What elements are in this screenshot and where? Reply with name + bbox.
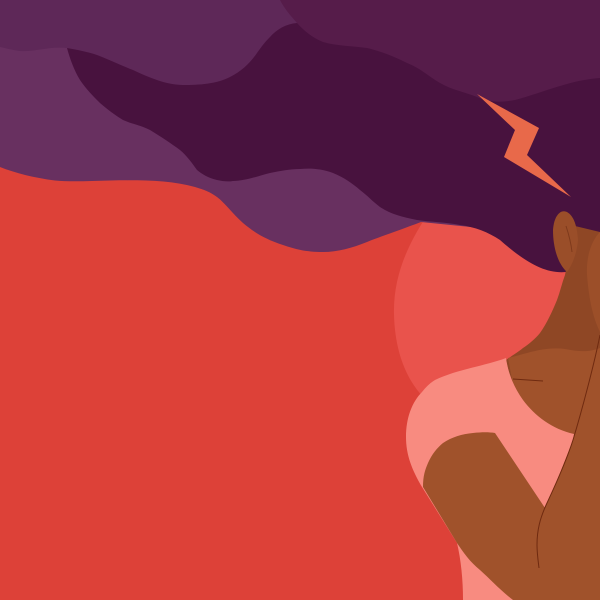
hair: dark main mass xyxy=(67,23,600,272)
figure: neck xyxy=(506,226,600,400)
hair: mid purple top layer xyxy=(0,0,300,110)
figure: face xyxy=(587,232,600,332)
figure: arm contour line xyxy=(537,335,600,568)
figure: chest highlight xyxy=(508,348,600,440)
hair: light purple back layer xyxy=(0,0,600,252)
icon: lightning bolt xyxy=(477,94,571,197)
figure: collarbone line xyxy=(513,379,543,381)
hair: plum top right layer xyxy=(280,0,600,102)
background blob: lighter red halo xyxy=(394,220,600,400)
figure: ear xyxy=(553,211,578,272)
figure: raised arm xyxy=(423,350,600,600)
figure: pink shirt xyxy=(406,358,574,600)
